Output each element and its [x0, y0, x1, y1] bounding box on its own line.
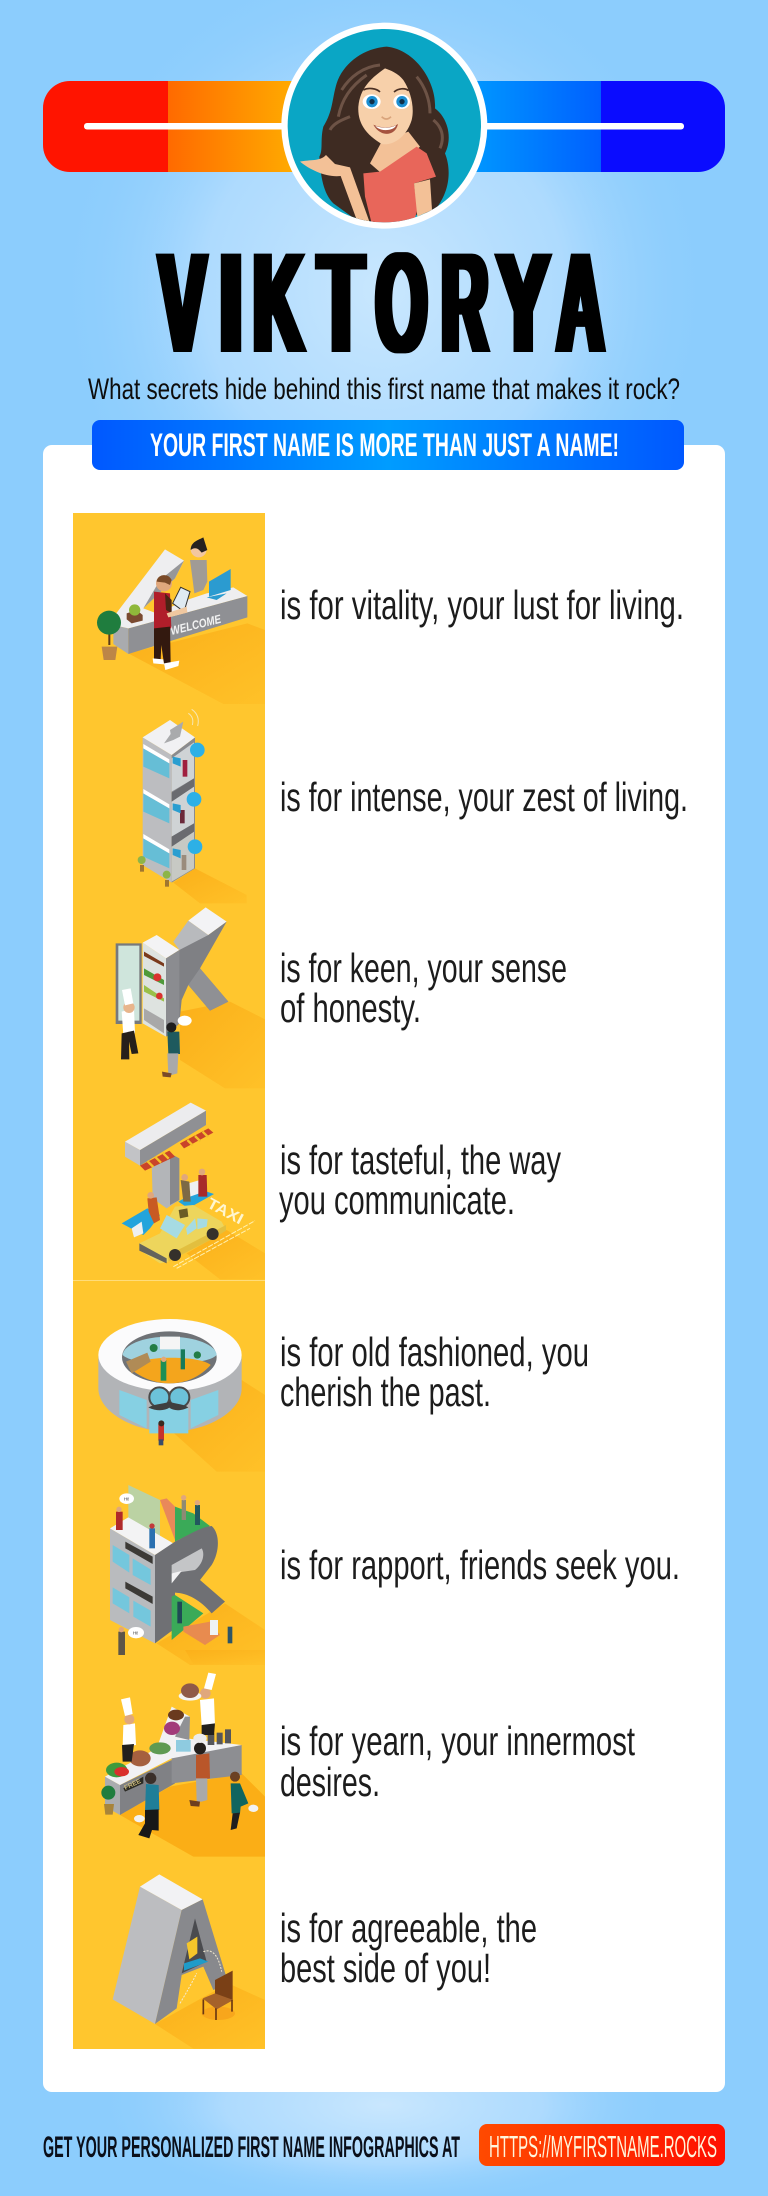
portrait medallion: [281, 23, 487, 229]
row text T: you communicate.: [279, 1177, 515, 1223]
title: R: [442, 224, 488, 383]
row text O: is for old fashioned, you: [280, 1329, 589, 1375]
illustration A: giant letter with chair: [113, 1874, 265, 2049]
illustration R: rooftop building: Hi!: [133, 1630, 138, 1635]
row text T: [279, 1137, 561, 1223]
row text K: [280, 945, 567, 1031]
row text K: is for keen, your sense: [280, 945, 567, 991]
row text Y: [280, 1718, 635, 1805]
illustration T: taxi stand: TAXI: [204, 1195, 246, 1228]
row text K: of honesty.: [280, 985, 421, 1031]
title: K: [253, 224, 304, 383]
headline banner: [92, 420, 684, 470]
illustration O: round building: [98, 1319, 265, 1472]
row text A: [280, 1905, 537, 1991]
row text O: [280, 1329, 589, 1415]
text: A: [557, 224, 604, 383]
row text A: best side of you!: [280, 1945, 491, 1991]
title: O: [376, 224, 427, 383]
illustration R: rooftop building: [110, 1485, 265, 1665]
row text O: cherish the past.: [280, 1369, 491, 1415]
title: T: [318, 224, 364, 383]
title: I: [219, 224, 243, 383]
yellow illustration column: [73, 513, 265, 2049]
illustration V: welcome desk: WELCOME: [169, 612, 223, 638]
title: [159, 224, 604, 383]
illustration T: taxi stand: [122, 1103, 265, 1279]
illustration Y: buffet counter: [101, 1650, 265, 1857]
white content panel: [43, 445, 725, 2092]
title: Y: [496, 224, 550, 383]
illustration Y: buffet counter: FREE: [123, 1778, 143, 1792]
row text A: is for agreeable, the: [280, 1905, 537, 1951]
row text T: is for tasteful, the way: [280, 1137, 561, 1183]
footer url button: [479, 2124, 725, 2166]
illustration K: fridge letter: [116, 907, 265, 1088]
title: V: [159, 224, 206, 383]
row text Y: is for yearn, your innermost: [280, 1718, 635, 1764]
header colour bar: [43, 81, 725, 172]
row text Y: desires.: [280, 1759, 380, 1805]
illustration V: welcome desk: [97, 537, 265, 704]
illustration I: office tower: [138, 709, 247, 903]
illustration R: rooftop building: Hi!: [124, 1496, 129, 1501]
